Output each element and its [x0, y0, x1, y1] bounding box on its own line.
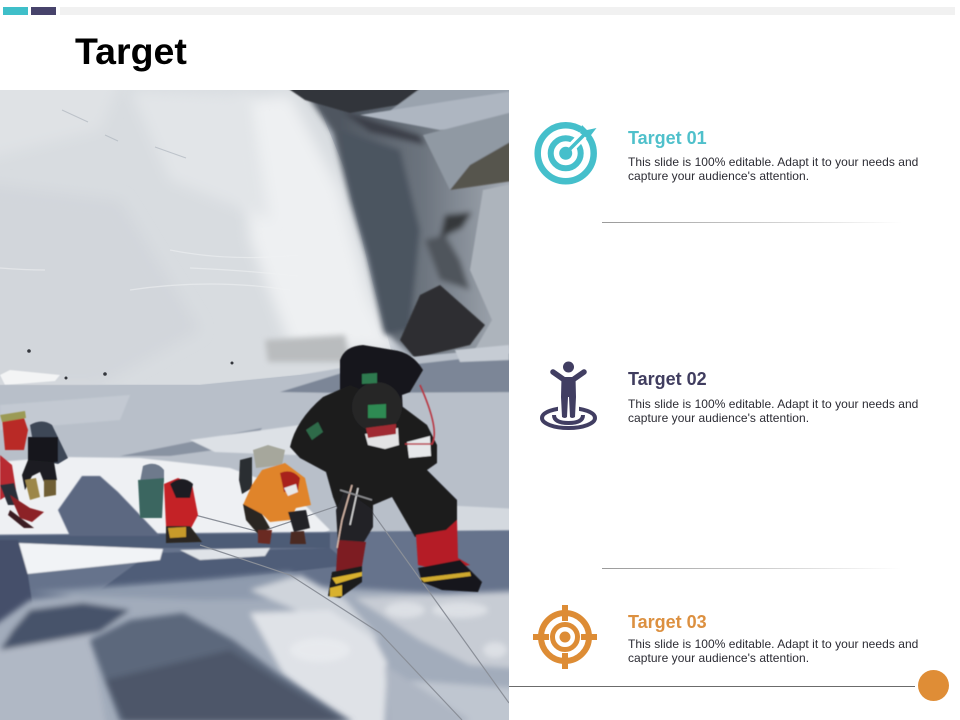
small climber with green pack [138, 464, 202, 543]
lead climber in black suit [290, 345, 482, 598]
orange-suited climber [239, 445, 311, 544]
top accent bar: light grey [60, 7, 955, 15]
text: Target 01 description [628, 155, 918, 183]
foreground snow [0, 572, 540, 720]
icon: person standing on target [540, 362, 597, 430]
photo: climbers on a snowy mountain [0, 90, 509, 720]
heading: Target 02: Target 02 [628, 369, 707, 389]
text: Target 02 description: This slide is 100% editable. Adapt it to your needs and [628, 397, 918, 411]
upper snowfield [0, 60, 395, 398]
text: Target 03 description: capture your audience's attention. [628, 651, 809, 665]
top accent bar: teal [3, 7, 28, 15]
text: Target 03 description [628, 637, 918, 665]
footer line [509, 686, 915, 687]
text: Target 03 description: This slide is 100% editable. Adapt it to your needs and [628, 637, 918, 651]
shadowed rock face [283, 60, 540, 358]
snow texture patches [290, 602, 507, 662]
top accent bar: navy [31, 7, 56, 15]
ropes [195, 505, 509, 720]
title: Target [75, 30, 187, 72]
text: Target 01 description: This slide is 100% editable. Adapt it to your needs and [628, 155, 918, 169]
climbers at far left [0, 411, 68, 528]
mid slope [0, 345, 540, 525]
heading: Target 03: Target 03 [628, 612, 707, 632]
text: Target 02 description [628, 397, 918, 425]
heading: Target 01: Target 01 [628, 128, 707, 148]
bright snow ridge [0, 457, 330, 545]
icon: crosshair target [533, 605, 597, 669]
footer orange circle [918, 670, 949, 701]
blue shadow bands [0, 476, 540, 650]
text: Target 01 description: capture your audience's attention. [628, 169, 809, 183]
large shadow in foreground [90, 613, 353, 720]
icon: bullseye with arrow [534, 122, 597, 184]
text: Target 02 description: capture your audience's attention. [628, 411, 809, 425]
